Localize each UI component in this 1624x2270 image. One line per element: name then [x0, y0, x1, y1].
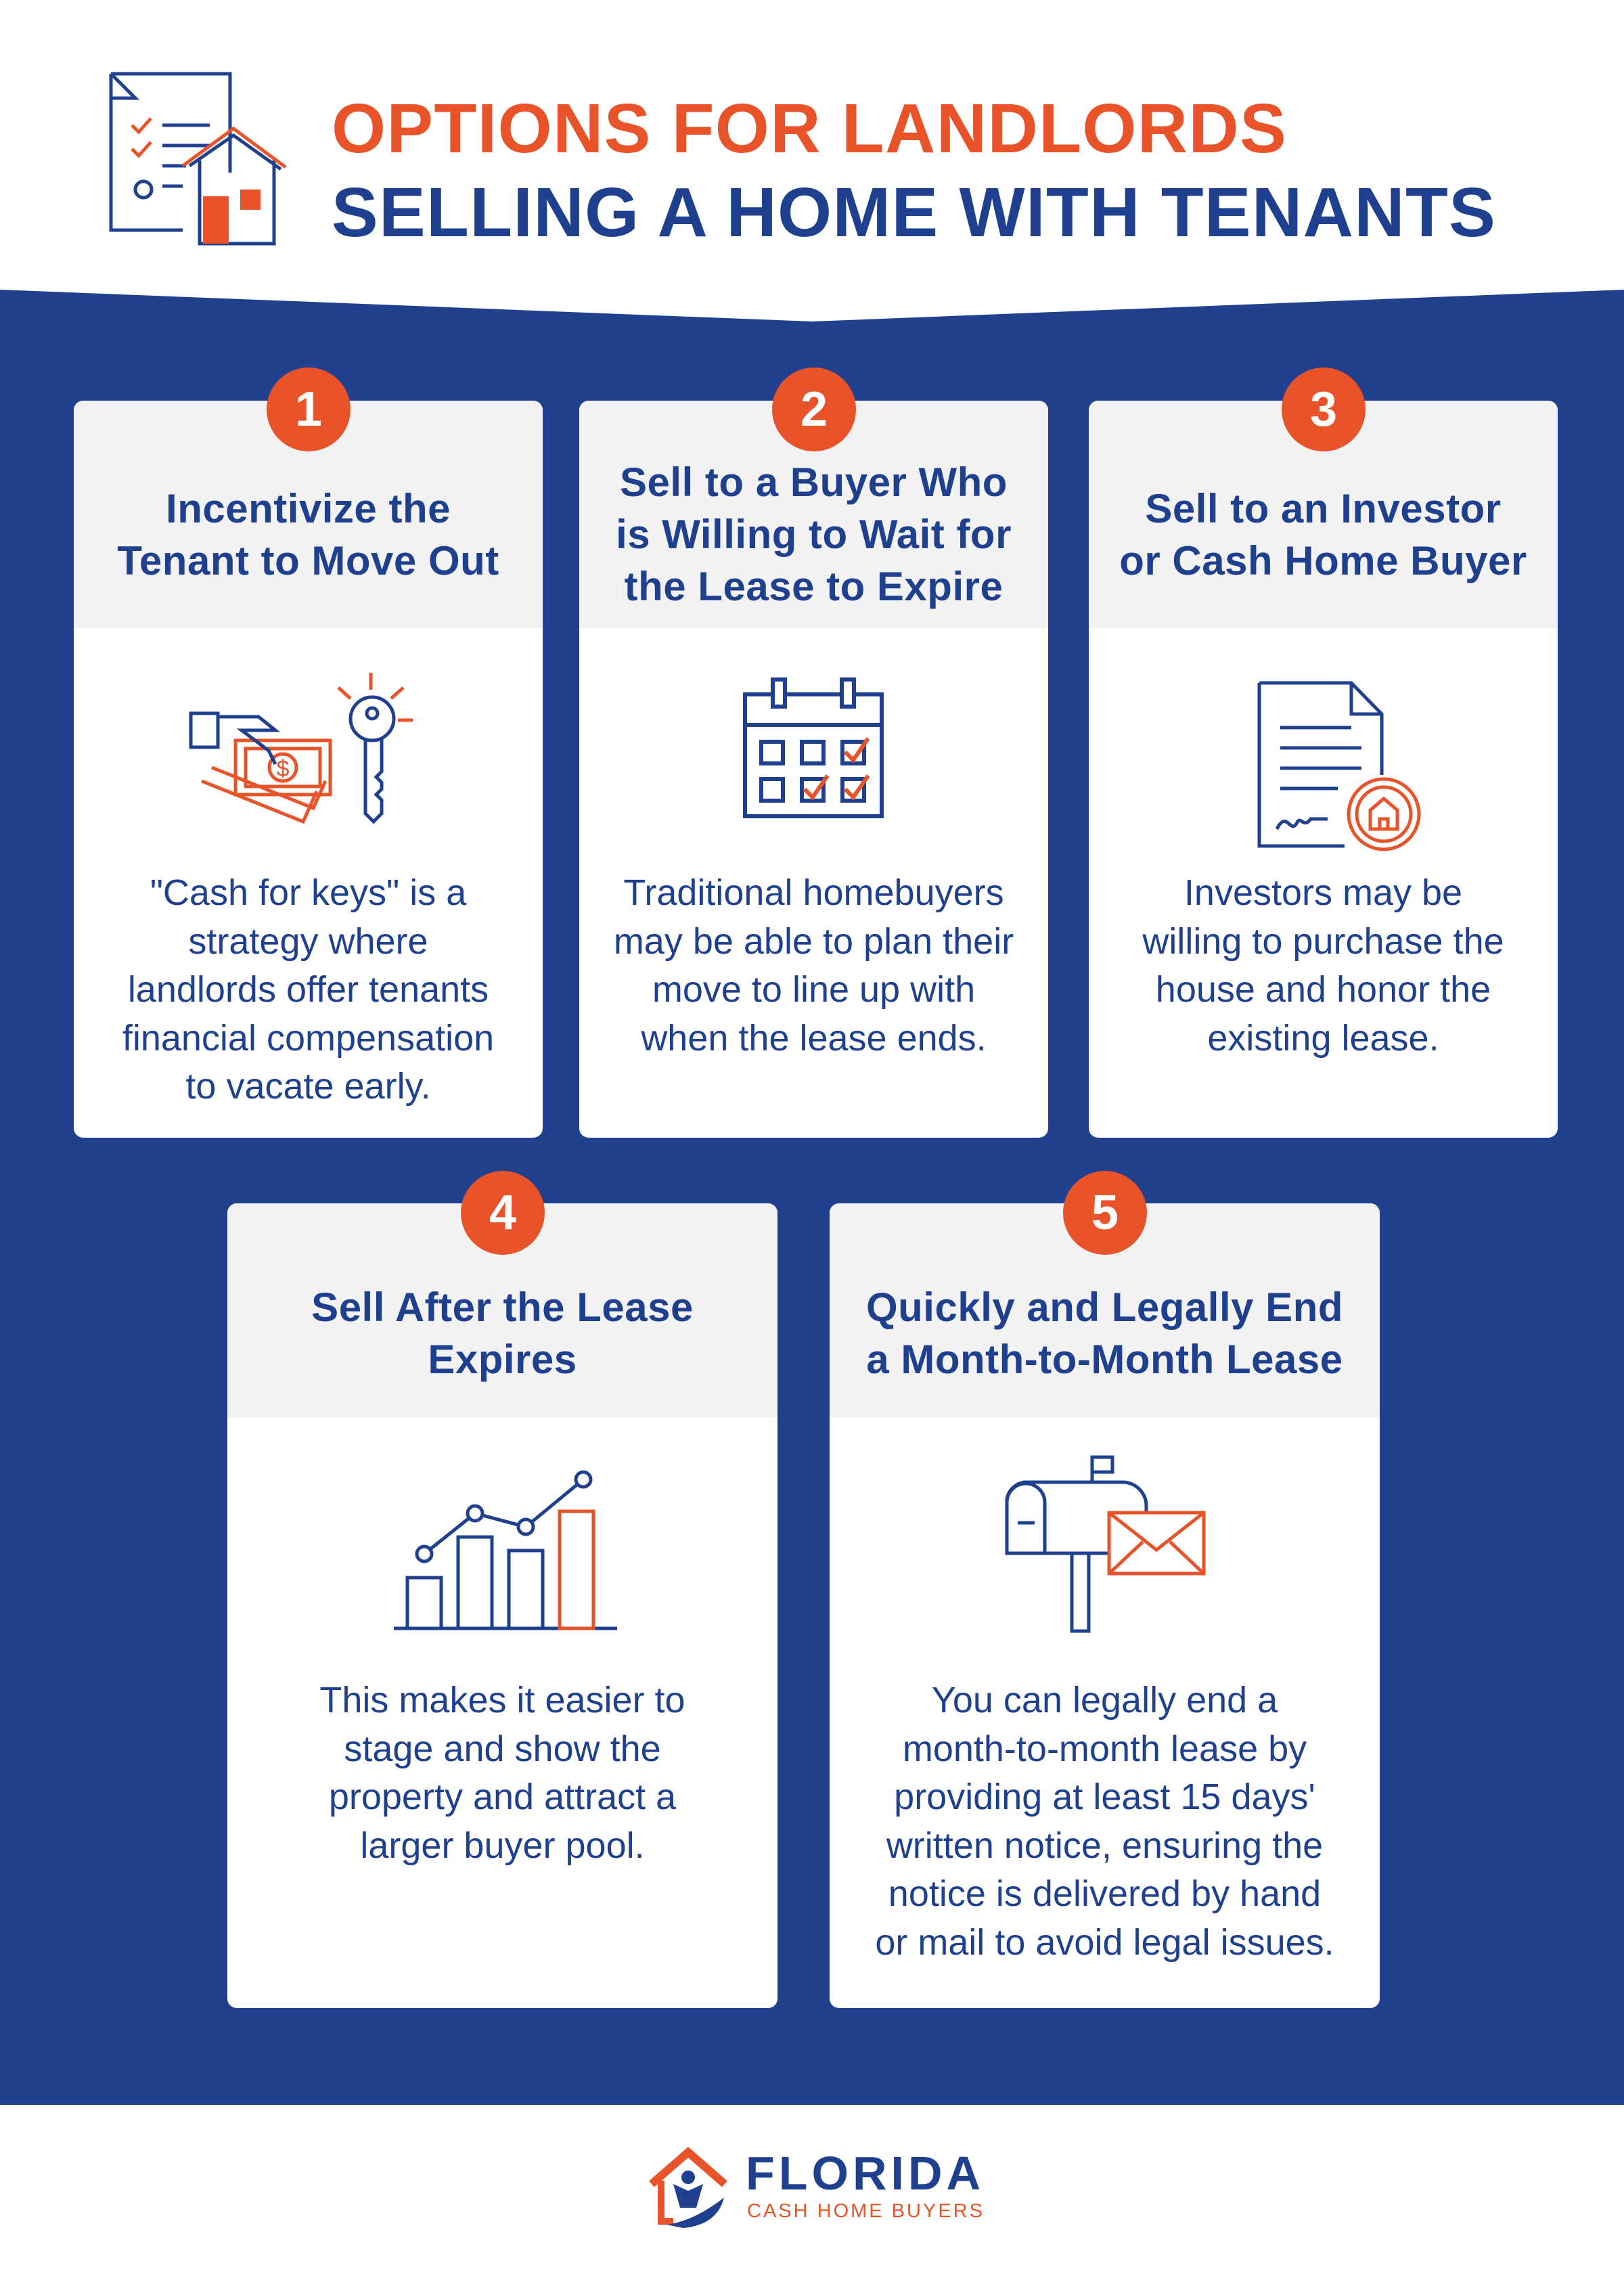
panel: option 3	[1089, 401, 1558, 1138]
title: OPTIONS FOR LANDLORDS	[332, 89, 1287, 167]
icon: document with house seal	[1257, 681, 1421, 851]
number 2: 2	[800, 382, 828, 437]
title 5: a Month-to-Month Lease	[866, 1337, 1343, 1382]
text 4: larger buyer pool.	[360, 1825, 645, 1865]
title 5	[866, 1285, 1343, 1382]
text 4	[319, 1680, 685, 1865]
number 4	[461, 1171, 545, 1255]
title 2	[616, 460, 1012, 609]
footer logo: CASH HOME BUYERS	[747, 2200, 985, 2222]
text 5: notice is delivered by hand	[888, 1873, 1321, 1914]
number 5: 5	[1091, 1186, 1119, 1240]
title 1: Incentivize the	[166, 486, 451, 531]
number 3	[1282, 368, 1366, 451]
text 1: "Cash for keys" is a	[150, 872, 466, 913]
text 2: Traditional homebuyers	[623, 872, 1004, 913]
header icon: checklist with house	[110, 72, 287, 245]
logo text: FLORIDA	[746, 2147, 985, 2200]
text 2: when the lease ends.	[641, 1018, 987, 1059]
title 3: or Cash Home Buyer	[1119, 538, 1527, 583]
title 2: is Willing to Wait for	[616, 512, 1012, 557]
text 5: providing at least 15 days'	[894, 1777, 1315, 1817]
title 4: Sell After the Lease	[311, 1285, 694, 1330]
title 4	[311, 1285, 694, 1382]
footer logo	[649, 2147, 985, 2228]
icon: bar chart	[394, 1470, 617, 1630]
text 2: may be able to plan their	[614, 920, 1014, 961]
text 1: strategy where	[188, 920, 428, 961]
logo icon	[649, 2147, 727, 2228]
text 4: property and attract a	[329, 1777, 676, 1817]
text 5: month-to-month lease by	[903, 1729, 1307, 1769]
text 3	[1142, 872, 1504, 1059]
icon: cash and key: $	[277, 756, 290, 782]
text 5: You can legally end a	[932, 1680, 1278, 1720]
icon: calendar	[743, 677, 884, 818]
panel: option 5	[830, 1203, 1380, 2008]
number 1	[267, 368, 351, 451]
text 5: written notice, ensuring the	[886, 1825, 1323, 1865]
title 1: Tenant to Move Out	[117, 538, 499, 583]
text 1	[122, 872, 494, 1107]
title 3: Sell to an Investor	[1145, 486, 1502, 531]
icon: mailbox with envelope	[1006, 1455, 1206, 1632]
icon: cash and key	[189, 673, 413, 824]
number 4: 4	[489, 1186, 516, 1240]
title 2: Sell to a Buyer Who	[620, 460, 1008, 505]
text 1: to vacate early.	[185, 1066, 431, 1107]
text 5: or mail to avoid legal issues.	[875, 1922, 1334, 1963]
title 3	[1119, 486, 1527, 583]
panel: option 4	[227, 1203, 777, 2008]
text 4: This makes it easier to	[319, 1680, 685, 1720]
title 5: Quickly and Legally End	[866, 1285, 1343, 1330]
panel: option 2	[579, 401, 1048, 1138]
text 5	[875, 1680, 1334, 1963]
number 1: 1	[295, 382, 322, 437]
number 3: 3	[1310, 382, 1337, 437]
text 3: existing lease.	[1207, 1018, 1439, 1059]
text 3: house and honor the	[1156, 969, 1491, 1010]
text 3: willing to purchase the	[1142, 920, 1504, 961]
title 4: Expires	[428, 1337, 577, 1382]
text 1: landlords offer tenants	[128, 969, 489, 1010]
text 2: move to line up with	[652, 969, 975, 1010]
title: SELLING A HOME WITH TENANTS	[332, 173, 1496, 251]
title	[332, 89, 1496, 251]
text 2	[614, 872, 1014, 1059]
title 1	[117, 486, 499, 583]
number 2	[772, 368, 856, 451]
number 5	[1063, 1171, 1147, 1255]
panel: option 1	[74, 401, 543, 1138]
title 2: the Lease to Expire	[625, 564, 1003, 609]
text 4: stage and show the	[344, 1729, 661, 1769]
text 3: Investors may be	[1184, 872, 1462, 913]
text 1: financial compensation	[122, 1018, 494, 1059]
